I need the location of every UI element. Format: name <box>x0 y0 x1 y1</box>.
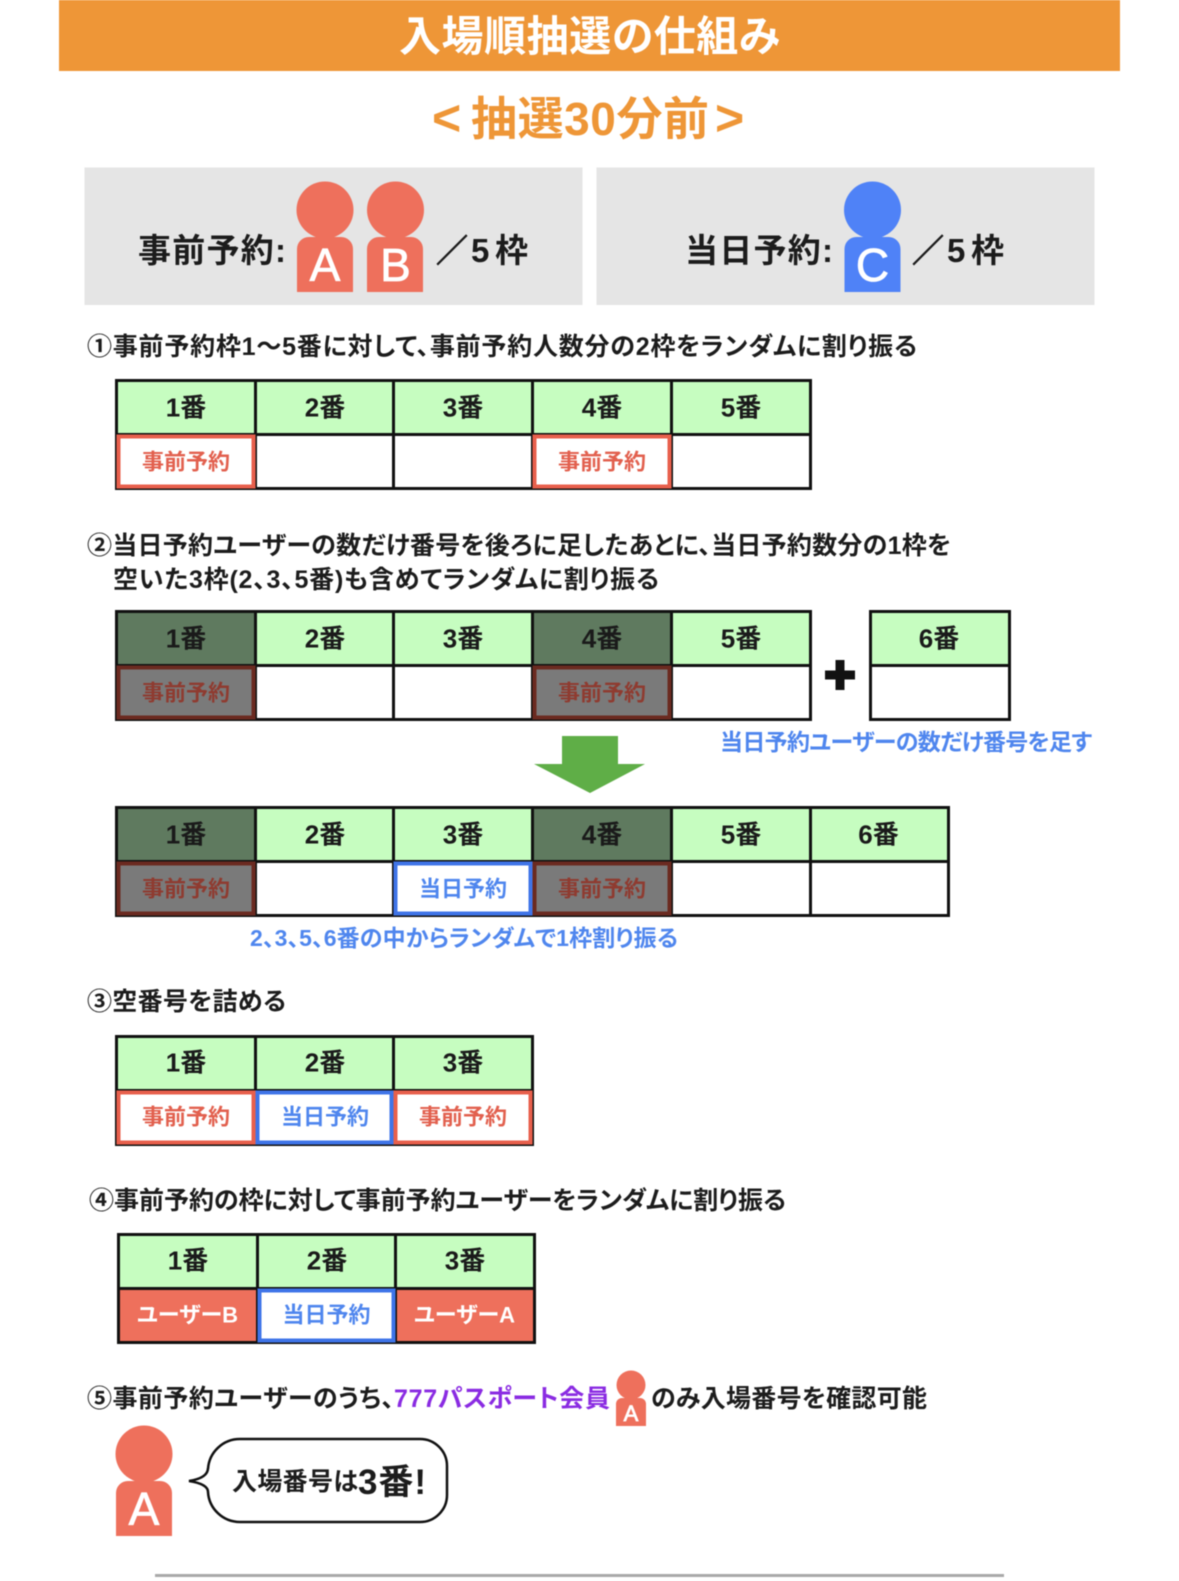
table: step 2 five slots: 4番 <box>582 624 622 654</box>
panel: advance reservations: ／ <box>436 233 468 269</box>
table: step 1: 2番 <box>305 392 345 422</box>
table: step 1: 1番 <box>166 392 206 422</box>
table: step 2 six slots: 3番 <box>443 820 483 850</box>
arrow: down <box>534 736 645 793</box>
icon: user B: B <box>380 239 411 291</box>
table: step 2 six slots: 事前予約 <box>142 876 230 902</box>
table: step 2 five slots: 2番 <box>305 624 345 654</box>
table: step 3: 当日予約 <box>281 1104 369 1130</box>
icon: user A <box>296 182 354 292</box>
step 2 heading <box>87 532 951 594</box>
table: step 4: ユーザーB <box>137 1302 238 1328</box>
icon: user C: C <box>856 239 889 291</box>
table: step 2 six slots: 5番 <box>721 820 761 850</box>
panel: same-day reservations: ／ <box>912 233 944 269</box>
step 1 heading: ①事前予約枠1〜5番に対して、事前予約人数分の2枠をランダムに割り振る <box>87 332 917 361</box>
table: step 1: 事前予約 <box>142 450 230 474</box>
icon: plus sign <box>825 660 855 690</box>
table: step 4: ユーザーA <box>414 1302 515 1328</box>
table: step 2 six slots: 当日予約 <box>419 876 507 902</box>
icon: large user A <box>116 1426 172 1536</box>
table: step 3: 3番 <box>443 1048 483 1078</box>
icon: user B <box>367 182 424 292</box>
table: step 1: 3番 <box>443 392 483 422</box>
step 2 heading: 空いた3枠(2、3、5番)も含めてランダムに割り振る <box>113 565 659 594</box>
icon: user C <box>844 182 901 292</box>
panel: same-day reservations <box>596 168 1094 305</box>
table: step 2 six slots: 4番 <box>582 820 622 850</box>
panel: advance reservations <box>84 168 582 305</box>
table: step 3: 1番 <box>166 1048 206 1078</box>
subheading: > <box>715 90 744 146</box>
icon: large user A: A <box>129 1483 160 1535</box>
step 5 heading: のみ入場番号を確認可能 <box>651 1385 927 1413</box>
table: step 3 <box>116 1036 532 1144</box>
table: step 1: 4番 <box>582 392 622 422</box>
table: step 2 six slots: 1番 <box>166 820 206 850</box>
table: added slot 6: 6番 <box>919 624 959 654</box>
panel: advance reservations: 5枠 <box>471 232 528 269</box>
icon: small user A: A <box>624 1401 639 1426</box>
table: step 3: 2番 <box>305 1048 345 1078</box>
panel: same-day reservations: 当日予約: <box>685 232 833 269</box>
table: step 4: 3番 <box>445 1246 485 1276</box>
table: step 4: 2番 <box>307 1246 347 1276</box>
table: step 2 six slots <box>116 808 948 916</box>
speech bubble <box>189 1439 447 1522</box>
step 2 heading: ②当日予約ユーザーの数だけ番号を後ろに足したあとに、当日予約数分の1枠を <box>87 532 951 560</box>
subheading: < <box>432 90 461 146</box>
caption: add numbers: 当日予約ユーザーの数だけ番号を足す <box>720 729 1092 755</box>
speech bubble: 入場番号は <box>232 1468 358 1496</box>
title banner <box>59 0 1120 71</box>
table: step 4: 当日予約 <box>282 1302 371 1328</box>
bottom divider <box>155 1574 1004 1577</box>
step 5 heading: 777パスポート会員 <box>394 1385 610 1413</box>
table: step 2 five slots: 事前予約 <box>142 680 230 706</box>
table: step 2 five slots <box>116 612 810 720</box>
table: step 2 five slots: 3番 <box>443 624 483 654</box>
panel: advance reservations: 事前予約: <box>138 232 286 269</box>
table: step 3: 事前予約 <box>419 1104 507 1130</box>
table: step 4 <box>118 1234 534 1342</box>
step 5 heading: ⑤事前予約ユーザーのうち、 <box>87 1385 394 1413</box>
table: step 2 six slots: 6番 <box>858 820 899 850</box>
icon: user A: A <box>310 239 341 291</box>
table: step 2 five slots: 事前予約 <box>558 680 646 706</box>
table: step 2 six slots: 2番 <box>305 820 345 850</box>
panel: same-day reservations: 5枠 <box>947 232 1004 269</box>
step 3 heading: ③空番号を詰める <box>87 988 286 1016</box>
table: step 1 <box>116 380 810 488</box>
subheading: 抽選30分前 <box>471 93 709 145</box>
icon: small user A <box>616 1370 646 1426</box>
step 5 heading <box>87 1370 927 1426</box>
table: step 2 six slots: 事前予約 <box>558 876 646 902</box>
table: step 1: 事前予約 <box>558 450 646 474</box>
table: added slot 6 <box>870 612 1010 720</box>
table: step 2 five slots: 1番 <box>166 624 206 654</box>
title banner: 入場順抽選の仕組み <box>399 13 780 60</box>
table: step 4: 1番 <box>168 1246 208 1276</box>
caption: random assignment: 2、3、5、6番の中からランダムで1枠割り振る <box>250 925 678 951</box>
speech bubble: 3番! <box>358 1463 426 1502</box>
table: step 1: 5番 <box>721 392 761 422</box>
table: step 2 five slots: 5番 <box>721 624 761 654</box>
table: step 3: 事前予約 <box>142 1104 230 1130</box>
step 4 heading: ④事前予約の枠に対して事前予約ユーザーをランダムに割り振る <box>89 1186 786 1215</box>
